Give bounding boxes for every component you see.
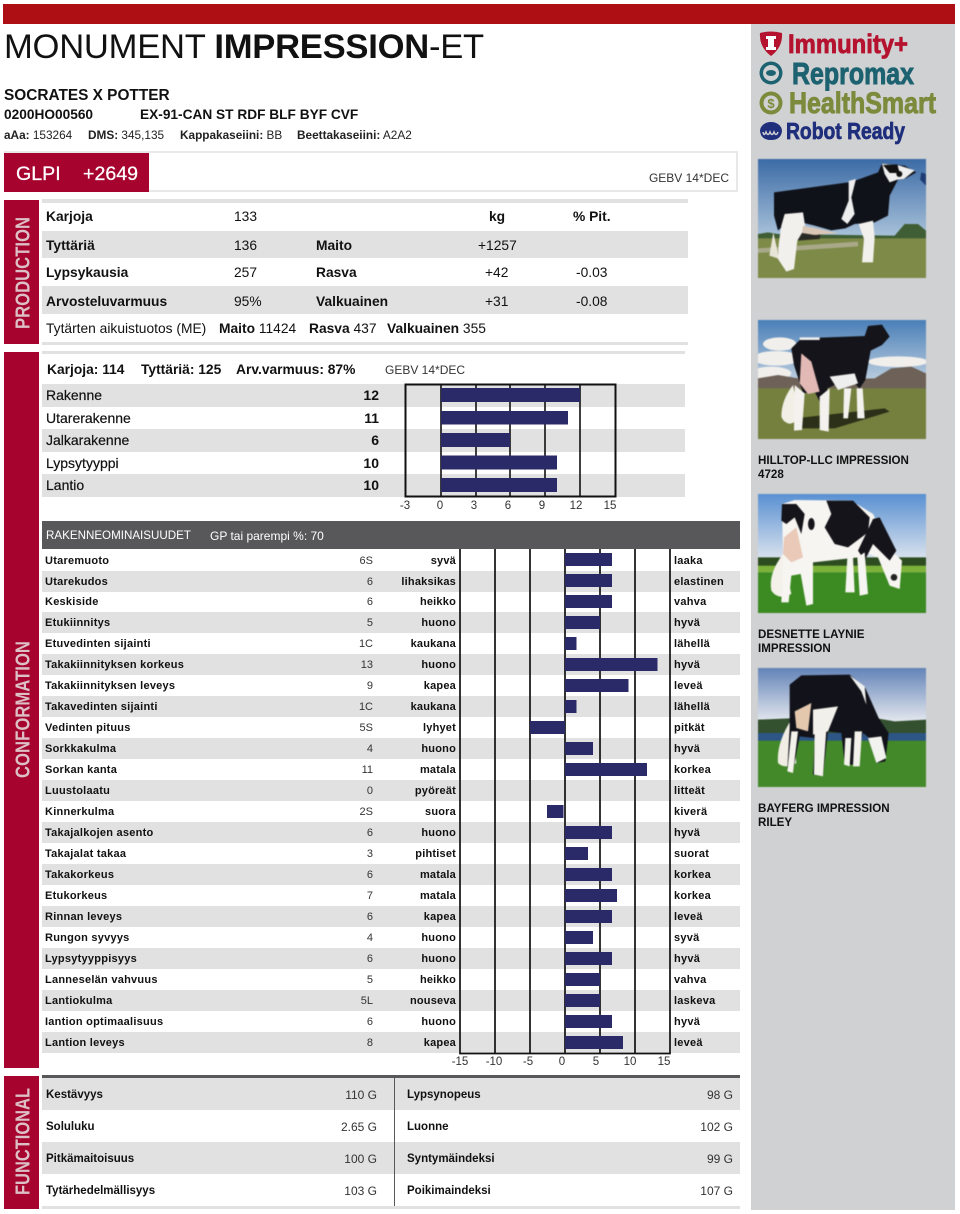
icon: dollar circle: $: [767, 96, 775, 111]
trait chart axis: 0: [559, 1056, 565, 1068]
trait table: kaukana: [411, 638, 456, 650]
trait table: huono: [421, 659, 456, 671]
production table: Tytärten aikuistuotos (ME): [46, 321, 206, 336]
production table: 133: [234, 209, 257, 224]
panel: type summary: Lantio: [46, 477, 84, 493]
GLPI badge: GLPI: [16, 163, 61, 185]
trait chart axis: -15: [452, 1056, 468, 1068]
trait table: 4: [367, 743, 373, 755]
trait table: Vedinten pituus: [45, 722, 131, 734]
trait table: korkea: [674, 890, 711, 902]
trait table: 5: [367, 974, 373, 986]
trait table: 3: [367, 848, 373, 860]
production table: +31: [485, 294, 508, 309]
trait table: nouseva: [410, 995, 456, 1007]
caption: Bayferg Impression Riley: BAYFERG IMPRESSION: [758, 802, 890, 815]
trait table: Utarekudos: [45, 576, 108, 588]
trait table: huono: [421, 932, 456, 944]
trait table: Iantion optimaalisuus: [45, 1016, 163, 1028]
trait table: Rungon syvyys: [45, 932, 130, 944]
photo: Hilltop-LLC Impression 4728: [757, 319, 927, 440]
summary rows: Rakenne: [46, 387, 102, 403]
production table: 136: [234, 238, 257, 253]
functional table: 103 G: [344, 1184, 377, 1198]
trait table: Etuvedinten sijainti: [45, 638, 151, 650]
trait table: 6: [367, 596, 373, 608]
trait section header: RAKENNEOMINAISUUDET: [46, 529, 191, 542]
functional table: Tytärhedelmällisyys: [46, 1185, 155, 1197]
functional table: Kestävyys: [46, 1089, 103, 1101]
trait table: kaukana: [411, 701, 456, 713]
production table: Valkuainen 355: [387, 321, 486, 336]
trait table: 6: [367, 576, 373, 588]
panel: type summary: 10: [363, 454, 379, 470]
summary header: Karjoja: 114: [47, 362, 124, 377]
summary chart axis: 6: [505, 500, 511, 512]
panel: type summary: Jalkarakenne: [46, 432, 129, 448]
trait chart axis: 10: [624, 1056, 636, 1068]
trait table: heikko: [420, 974, 456, 986]
summary chart axis: 15: [604, 500, 616, 512]
trait table: kiverä: [674, 806, 707, 818]
production table: Maito 11424: [219, 321, 296, 336]
trait table: pitkät: [674, 722, 705, 734]
trait table: Takajalat takaa: [45, 848, 126, 860]
trait table: Takakiinnityksen leveys: [45, 680, 175, 692]
trait table: 1C: [359, 701, 373, 713]
functional table: Poikimaindeksi: [407, 1185, 491, 1197]
production table: Maito: [316, 238, 352, 253]
icon: repromax circle: [760, 62, 782, 84]
trait table: Utaremuoto: [45, 554, 109, 566]
genetic codes: DMS: 345,135: [88, 128, 164, 142]
trait table: syvä: [674, 932, 699, 944]
sidebar background: [751, 24, 955, 1210]
GLPI panel: [4, 151, 738, 192]
trait table: korkea: [674, 764, 711, 776]
summary header: GEBV 14*DEC: [385, 363, 465, 377]
production table: Karjoja: [46, 209, 93, 224]
conformation side label: [4, 352, 39, 1068]
trait table: 6: [367, 911, 373, 923]
trait table: hyvä: [674, 827, 700, 839]
trait table: Etukorkeus: [45, 890, 107, 902]
registration and classification: EX-91-CAN ST RDF BLF BYF CVF: [140, 107, 358, 122]
trait chart axis: -5: [523, 1056, 533, 1068]
trait table: lähellä: [674, 701, 710, 713]
trait table: hyvä: [674, 743, 700, 755]
trait table: hyvä: [674, 953, 700, 965]
production table: Valkuainen: [316, 294, 388, 309]
summary bar chart: [404, 384, 616, 498]
panel: type summary: 6: [371, 432, 379, 448]
icon: dollar circle: [760, 92, 782, 114]
panel: type summary: 10: [363, 477, 379, 493]
genetic codes: [4, 128, 412, 142]
photo: Desnette Laynie Impression: [757, 493, 927, 614]
panel: type summary: 11: [364, 410, 379, 426]
trait table: Sorkkakulma: [45, 743, 116, 755]
trait table: elastinen: [674, 576, 724, 588]
photo: Bayferg Impression Riley: [757, 667, 927, 788]
trait table: lihaksikas: [401, 576, 456, 588]
trait table: leveä: [674, 680, 703, 692]
trait table: matala: [420, 764, 456, 776]
trait table: Lantiokulma: [45, 995, 113, 1007]
trait bar chart: [459, 549, 671, 1054]
panel: functional: [4, 1075, 740, 1209]
trait table: vahva: [674, 596, 706, 608]
summary header: Tyttäriä: 125: [141, 362, 221, 377]
trait table: Etukiinnitys: [45, 617, 110, 629]
summary header: Arv.varmuus: 87%: [236, 362, 355, 377]
trait table: Kinnerkulma: [45, 806, 114, 818]
functional table: 99 G: [707, 1152, 733, 1166]
conformation side label: CONFORMATION: [12, 641, 34, 778]
functional table: Syntymäindeksi: [407, 1153, 495, 1165]
trait table: suorat: [674, 848, 709, 860]
trait table: matala: [420, 890, 456, 902]
trait table: 6: [367, 827, 373, 839]
functional table: Lypsynopeus: [407, 1089, 481, 1101]
trait table: Takakiinnityksen korkeus: [45, 659, 184, 671]
production table: Rasva 437: [309, 321, 377, 336]
production table: -0.03: [576, 265, 607, 280]
trait table: lyhyet: [423, 722, 456, 734]
trait table: 6: [367, 953, 373, 965]
caption: Hilltop-LLC Impression 4728: [758, 454, 909, 481]
functional table: [42, 1075, 740, 1209]
production table: +42: [485, 265, 508, 280]
trait table: Luustolaatu: [45, 785, 110, 797]
trait table: korkea: [674, 869, 711, 881]
trait table: 1C: [359, 638, 373, 650]
functional table: 2.65 G: [341, 1120, 377, 1134]
trait table: kapea: [424, 680, 456, 692]
caption: Desnette Laynie Impression: IMPRESSION: [758, 642, 831, 655]
photo: sire side profile: [757, 158, 927, 279]
trait table: 9: [367, 680, 373, 692]
production side label: [4, 200, 39, 344]
trait section header: GP tai parempi %: 70: [210, 529, 324, 543]
trait table: 5: [367, 617, 373, 629]
genetic codes: aAa: 153264: [4, 128, 72, 142]
icon: robot udder: [760, 122, 782, 140]
GEBV date: GEBV 14*DEC: [649, 171, 729, 185]
trait table: leveä: [674, 911, 703, 923]
trait table: 8: [367, 1037, 373, 1049]
genetic codes: Kappakaseiini: BB: [180, 128, 282, 142]
trait table: hyvä: [674, 617, 700, 629]
trait table: leveä: [674, 1037, 703, 1049]
trait table: kapea: [424, 1037, 456, 1049]
trait table: 11: [362, 764, 373, 776]
functional table: 110 G: [345, 1088, 377, 1102]
trait table: pyöreät: [415, 785, 456, 797]
functional table: Pitkämaitoisuus: [46, 1153, 134, 1165]
functional table: 102 G: [700, 1120, 733, 1134]
functional table: 100 G: [344, 1152, 377, 1166]
production table: 95%: [234, 294, 262, 309]
trait table: laskeva: [674, 995, 716, 1007]
trait table: Sorkan kanta: [45, 764, 117, 776]
registration and classification: [4, 107, 358, 122]
production table: Lypsykausia: [46, 265, 128, 280]
trait table: Rinnan leveys: [45, 911, 122, 923]
production table: [42, 199, 688, 345]
functional table: 98 G: [707, 1088, 733, 1102]
trait table: huono: [421, 953, 456, 965]
production table: % Pit.: [573, 209, 611, 224]
trait table: 6: [367, 869, 373, 881]
caption: Hilltop-LLC Impression 4728: 4728: [758, 468, 784, 481]
title: MONUMENT IMPRESSION-ET: [4, 28, 484, 66]
trait table: Takakorkeus: [45, 869, 114, 881]
panel: type summary: Utarerakenne: [46, 410, 131, 426]
caption: Bayferg Impression Riley: RILEY: [758, 816, 792, 829]
production table: Tyttäriä: [46, 238, 95, 253]
trait table: hyvä: [674, 1016, 700, 1028]
trait table: Lanneselän vahvuus: [45, 974, 158, 986]
caption: Bayferg Impression Riley: [758, 802, 890, 829]
trait chart axis: [452, 1056, 670, 1068]
pedigree: SOCRATES X POTTER: [4, 87, 170, 104]
summary rows: 12: [363, 387, 379, 403]
trait table: lähellä: [674, 638, 710, 650]
trait table: 2S: [360, 806, 373, 818]
trait table: syvä: [431, 554, 456, 566]
functional table: Luonne: [407, 1121, 449, 1133]
summary chart axis: 12: [570, 500, 582, 512]
trait table: 6S: [360, 554, 373, 566]
trait table: Takajalkojen asento: [45, 827, 153, 839]
trait table: Takavedinten sijainti: [45, 701, 158, 713]
production table: Arvosteluvarmuus: [46, 294, 167, 309]
production table: kg: [489, 209, 505, 224]
panel: type summary: [42, 351, 685, 497]
top red bar: [3, 4, 955, 24]
functional table: 107 G: [700, 1184, 733, 1198]
trait table: 5L: [361, 995, 373, 1007]
trait table: 6: [367, 1016, 373, 1028]
GLPI badge: +2649: [83, 163, 138, 185]
logos: Immunity+ Repromax HealthSmart Robot Ready: Immunity+: [788, 29, 908, 59]
production table: 257: [234, 265, 257, 280]
summary chart axis: 9: [539, 500, 545, 512]
trait table: huono: [421, 743, 456, 755]
summary header: [47, 362, 465, 377]
GLPI badge: [4, 153, 149, 192]
registration and classification: 0200HO00560: [4, 107, 93, 122]
production table: Rasva: [316, 265, 357, 280]
trait section header: [42, 521, 740, 549]
trait table: matala: [420, 869, 456, 881]
panel: type summary: Lypsytyyppi: [46, 454, 119, 470]
trait table: 0: [367, 785, 373, 797]
trait table: huono: [421, 617, 456, 629]
trait chart axis: -10: [486, 1056, 502, 1068]
genetic codes: Beettakaseiini: A2A2: [297, 128, 412, 142]
functional side label: [4, 1076, 39, 1209]
trait table: 5S: [360, 722, 373, 734]
caption: Desnette Laynie Impression: [758, 628, 865, 655]
trait chart axis: 5: [593, 1056, 599, 1068]
trait table: suora: [425, 806, 456, 818]
trait table: huono: [421, 1016, 456, 1028]
logos: Immunity+ Repromax HealthSmart Robot Ready: Robot Ready: [786, 118, 905, 144]
trait table: Keskiside: [45, 596, 99, 608]
logos: Immunity+ Repromax HealthSmart Robot Ready: Repromax: [792, 56, 915, 91]
caption: Hilltop-LLC Impression 4728: HILLTOP-LLC IMPRESSION: [758, 454, 909, 467]
summary chart axis: -3: [400, 500, 410, 512]
trait table: vahva: [674, 974, 706, 986]
trait table: 7: [367, 890, 373, 902]
trait chart axis: 15: [658, 1056, 670, 1068]
functional table: Soluluku: [46, 1121, 95, 1133]
trait table: Lypsytyyppisyys: [45, 953, 137, 965]
caption: Desnette Laynie Impression: DESNETTE LAYNIE: [758, 628, 865, 641]
summary chart axis: 3: [471, 500, 477, 512]
trait table: 13: [361, 659, 373, 671]
trait table: laaka: [674, 554, 703, 566]
production table: +1257: [478, 238, 517, 253]
trait table: [42, 554, 740, 1053]
summary chart axis: 0: [437, 500, 443, 512]
summary rows: [42, 384, 685, 406]
trait table: kapea: [424, 911, 456, 923]
summary chart axis: [400, 500, 616, 512]
panel: production: [4, 199, 688, 345]
trait table: 4: [367, 932, 373, 944]
icon: shield: [760, 32, 782, 56]
trait table: Lantion leveys: [45, 1037, 125, 1049]
logos: Immunity+ Repromax HealthSmart Robot Ready: [760, 29, 936, 144]
trait table: litteät: [674, 785, 705, 797]
trait table: pihtiset: [415, 848, 456, 860]
trait table: huono: [421, 827, 456, 839]
production table: -0.08: [576, 294, 607, 309]
trait table: heikko: [420, 596, 456, 608]
trait table: hyvä: [674, 659, 700, 671]
